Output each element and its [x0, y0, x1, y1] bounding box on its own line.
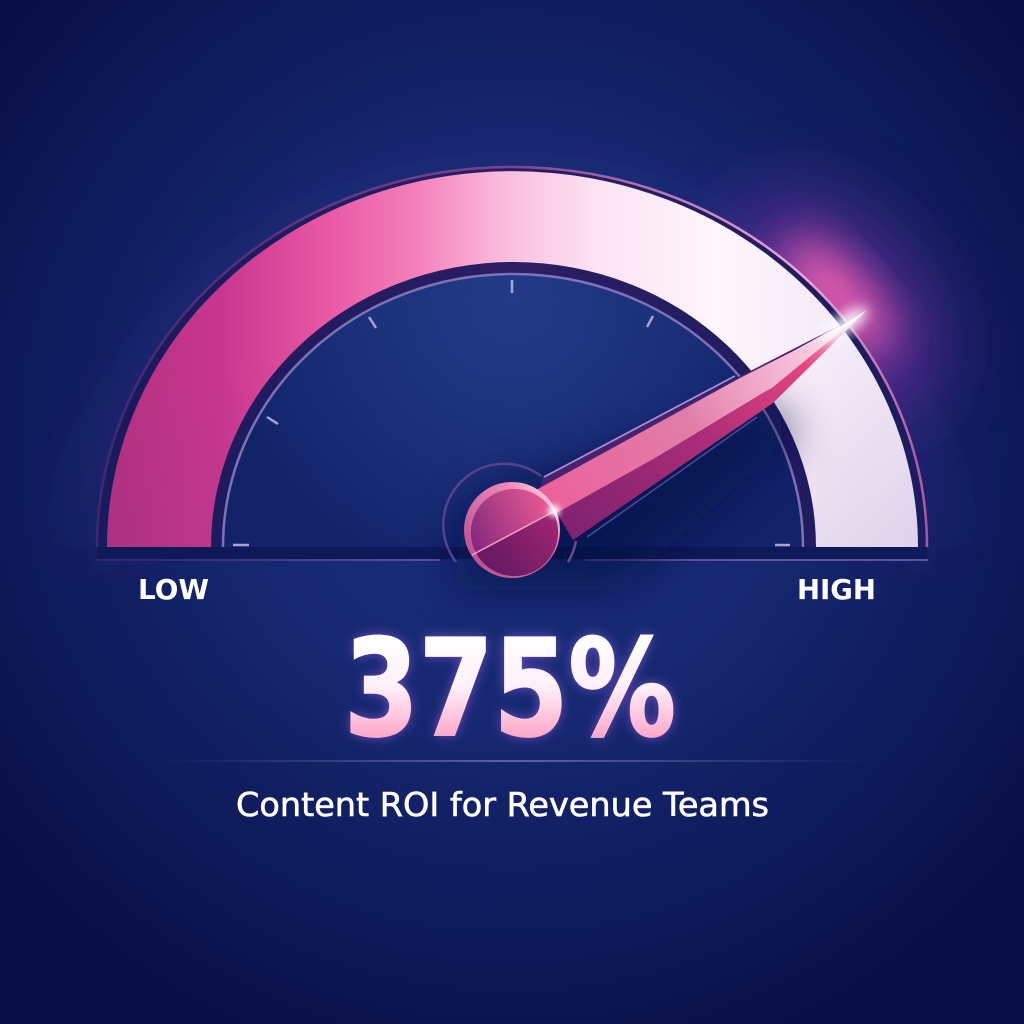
- gauge: [97, 167, 928, 560]
- value: 375%: 375%: [344, 611, 676, 767]
- hub: [443, 464, 576, 578]
- back edge highlight: [544, 376, 735, 477]
- hub ridge: [472, 512, 553, 555]
- coloured arc: [107, 171, 918, 547]
- dial interior: [222, 274, 802, 547]
- hub ring short: [568, 541, 576, 562]
- hub highlight: [548, 505, 560, 517]
- label: high: HIGH: [797, 573, 876, 606]
- label: low: LOW: [138, 573, 209, 606]
- inner thin line: [223, 274, 803, 547]
- hub lower half: [476, 512, 558, 576]
- baseline right: [585, 559, 928, 561]
- needle back edge: [540, 320, 850, 490]
- hub rim: [464, 482, 560, 578]
- hub and needle shadow: [450, 400, 800, 590]
- parallel shadow line: [587, 417, 757, 537]
- dark floor band: [97, 547, 927, 559]
- tick marks: [233, 280, 790, 545]
- needle lower facet: [557, 310, 867, 540]
- needle upper facet: [536, 310, 867, 513]
- outer thin line: [97, 167, 927, 547]
- hub ring: [443, 464, 541, 562]
- needle: [450, 302, 872, 590]
- value: 375%: 375%: [344, 611, 676, 767]
- baseline left: [97, 559, 440, 561]
- gauge glow: [100, 159, 978, 547]
- subtitle: Content ROI for Revenue Teams: [236, 785, 769, 824]
- hub upper half: [471, 489, 553, 553]
- dark band behind arc: [97, 167, 927, 547]
- divider: [160, 760, 870, 762]
- tip flare: [816, 302, 872, 348]
- arc shading: [107, 171, 918, 547]
